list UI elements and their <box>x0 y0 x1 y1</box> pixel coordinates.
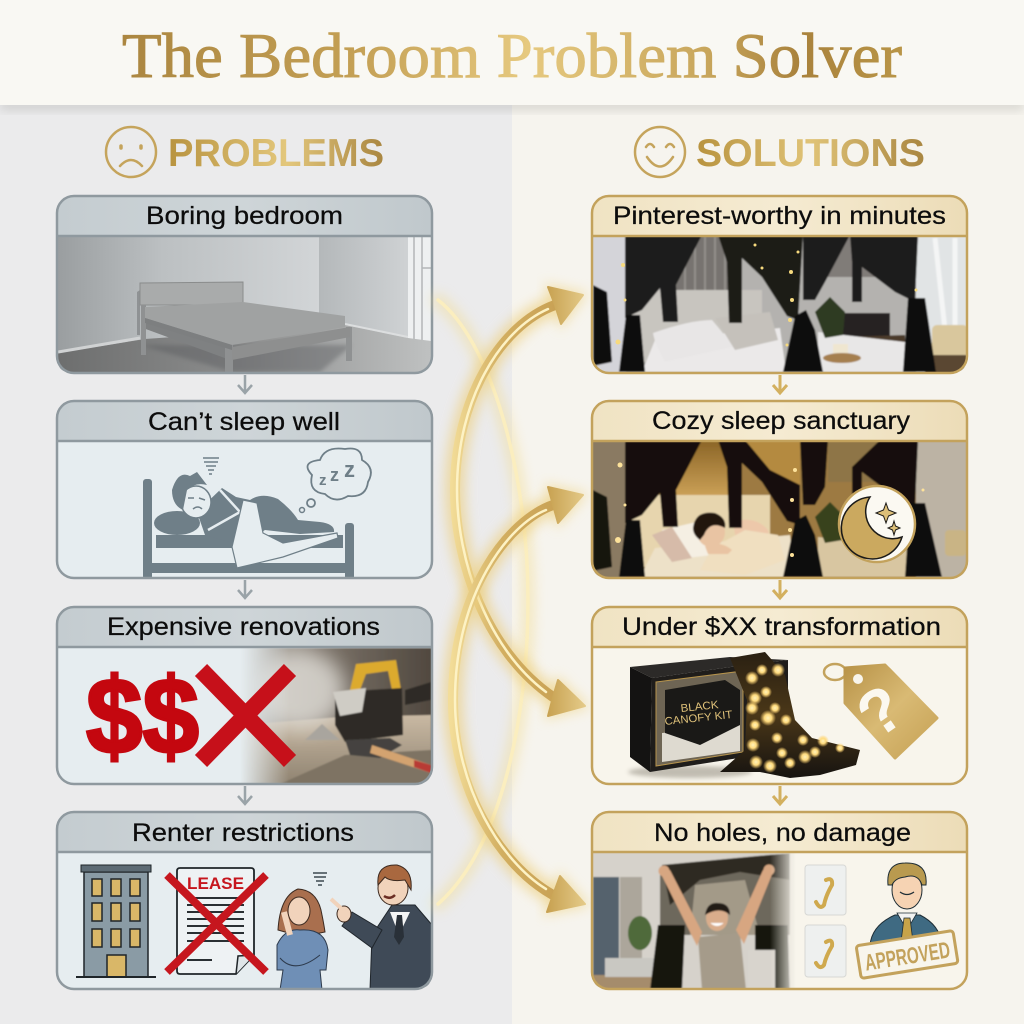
panel: expensive renovations <box>57 607 435 784</box>
product: black canopy kit box: BLACK <box>680 699 720 715</box>
label: under: Under $XX transformation <box>622 613 941 641</box>
label: renovations: Expensive renovations <box>107 613 380 641</box>
icon: worried renter <box>277 873 328 990</box>
arrows: to solution 2 and 4 <box>453 487 585 912</box>
card frame <box>57 196 432 373</box>
label: sleep: Can’t sleep well <box>148 408 340 436</box>
icon: approving landlord <box>870 863 942 945</box>
header: sleep <box>57 401 432 441</box>
header: renovations <box>57 607 432 647</box>
header: no holes <box>592 812 967 852</box>
header: renter <box>57 812 432 852</box>
card frame <box>592 607 967 784</box>
arc: pale return path <box>438 300 528 904</box>
arrow: solution 1 to 2 <box>773 375 787 393</box>
photo: happy man under canopy <box>590 850 795 990</box>
icon: smiling face <box>635 127 685 177</box>
arrows: to solution 1 and 3 <box>455 287 585 716</box>
panel: pinterest-worthy <box>590 196 970 375</box>
header: pinterest <box>592 196 967 236</box>
card frame <box>592 812 967 989</box>
thought bubble: zzz: z <box>330 465 339 485</box>
icon: red cross <box>201 670 290 761</box>
panel: boring bedroom <box>57 196 432 373</box>
header: boring bedroom <box>57 196 432 236</box>
thought bubble: zzz <box>300 448 371 512</box>
body background <box>593 648 966 783</box>
label: boring bedroom: Boring bedroom <box>146 202 343 230</box>
header: cozy <box>592 401 967 441</box>
panel: cozy sleep sanctuary <box>590 401 970 580</box>
icon: restless sleeper in bed <box>143 458 354 583</box>
stamp: approved: APPROVED <box>863 936 952 976</box>
panel: renter restrictions <box>57 812 432 990</box>
icon: red dollars: $$ <box>86 655 199 776</box>
background: problems side <box>0 105 512 1024</box>
photo: canopy bed day <box>590 235 970 375</box>
card frame <box>57 401 432 578</box>
label: renter: Renter restrictions <box>132 819 354 847</box>
arrow: problem 2 to 3 <box>238 580 252 598</box>
photo: empty grey bedroom <box>58 237 431 373</box>
arrows: crossing golden paths <box>438 287 585 912</box>
arrow: problem 1 to 2 <box>238 375 252 393</box>
photo: renovation rubble <box>240 648 435 784</box>
label: cozy: Cozy sleep sanctuary <box>652 407 911 435</box>
icon: crossed out lease: LEASE <box>187 874 244 893</box>
arrow: problem 3 to 4 <box>238 786 252 804</box>
icon: crossed out lease <box>167 868 266 974</box>
product: canopy net with lights <box>720 652 860 778</box>
body background <box>58 853 431 989</box>
card frame <box>592 196 967 373</box>
title: The Bedroom Problem Solver <box>122 20 902 91</box>
icon: adhesive hooks <box>805 865 846 977</box>
panel: no holes <box>590 812 967 990</box>
icon: apartment building <box>76 865 156 977</box>
label: pinterest: Pinterest-worthy in minutes <box>613 202 946 230</box>
thought bubble: zzz: z <box>344 457 355 482</box>
product: black canopy kit box <box>628 657 788 778</box>
product: black canopy kit box: CANOFY KIT <box>664 709 733 728</box>
header: under <box>592 607 967 647</box>
panel: can't sleep well <box>57 401 432 583</box>
icon: mystery price tag: ? <box>844 670 917 752</box>
heading: problems: PROBLEMS <box>168 132 384 175</box>
photo fade <box>770 853 798 988</box>
thought bubble: zzz: z <box>319 472 326 489</box>
arrow: solution 2 to 3 <box>773 580 787 598</box>
card frame <box>57 607 432 784</box>
label: no holes: No holes, no damage <box>654 819 911 847</box>
arrow: solution 3 to 4 <box>773 786 787 804</box>
body background <box>593 853 966 988</box>
header band <box>0 0 1024 110</box>
icon: mystery price tag <box>824 664 937 758</box>
photo: woman sleeping under canopy <box>590 440 970 580</box>
body background <box>58 648 431 784</box>
icon: sad face <box>106 127 156 177</box>
stamp: approved <box>856 931 958 978</box>
background: solutions side <box>512 105 1024 1024</box>
body background <box>58 442 431 578</box>
icon: moon and stars badge <box>839 486 915 562</box>
heading: solutions: SOLUTIONS <box>696 132 925 175</box>
icon: landlord pointing <box>331 865 432 990</box>
panel: under $XX <box>592 607 967 784</box>
card frame <box>57 812 432 989</box>
card frame <box>592 401 967 578</box>
